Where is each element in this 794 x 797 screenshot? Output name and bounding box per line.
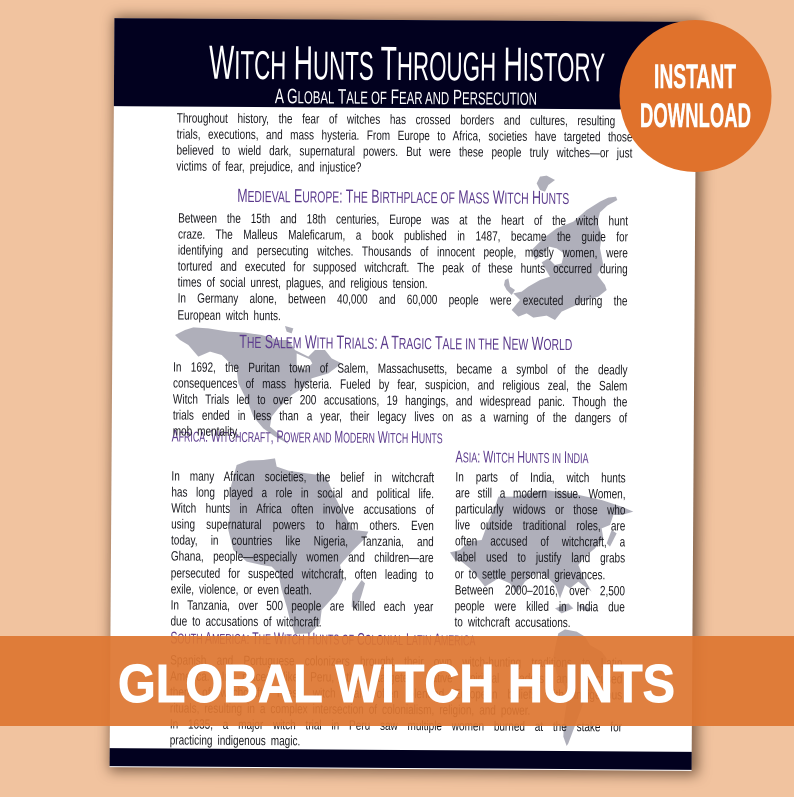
map: South America bbox=[553, 629, 607, 746]
paragraph: Africa bbox=[170, 469, 434, 629]
paragraph: Asia: particularly widows or those who bbox=[455, 502, 625, 518]
banner: Global Witch Hunts: GLOBAL WITCH HUNTS bbox=[118, 654, 675, 714]
paragraph: Salem: Witch Trials led to over 200 accusations, 19 hangings, and widespread panic. Though the bbox=[173, 392, 627, 410]
intro paragraph: believed to wield dark, supernatural powers. But were these people truly witches—or just bbox=[177, 143, 632, 161]
paragraph: Salem bbox=[173, 360, 628, 439]
paragraph: Africa: In Tanzania, over 500 people are killed each year bbox=[171, 597, 433, 614]
paragraph: Africa: persecuted for suspected witchcraft, often leading to bbox=[171, 565, 434, 582]
paragraph: Africa: exile, violence, or even death. bbox=[171, 581, 312, 597]
paragraph: Africa: Ghana, people—especially women and children—are bbox=[171, 549, 434, 566]
paragraph: Salem: In 1692, the Puritan town of Salem, Massachusetts, became a symbol of the deadly bbox=[173, 360, 628, 377]
paragraph: Asia bbox=[454, 469, 626, 630]
intro paragraph: Throughout history, the fear of witches has crossed borders and cultures, resulting in bbox=[177, 111, 633, 128]
paragraph: Asia: are still a modern issue. Women, bbox=[455, 485, 626, 502]
paragraph: Medieval Europe: craze. The Malleus Maleficarum, a book published in 1487, became the guide for bbox=[178, 227, 628, 245]
paragraph: Africa: In many African societies, the belief in witchcraft bbox=[171, 469, 434, 485]
paragraph: Asia: people were killed in India due bbox=[455, 598, 625, 614]
paragraph: South America: practicing indigenous magic. bbox=[170, 732, 300, 748]
intro paragraph: trials, executions, and mass hysteria. From Europe to Africa, societies have targeted those bbox=[177, 127, 633, 145]
paragraph: Asia: or to settle personal grievances. bbox=[455, 566, 605, 582]
paragraph: Africa: has long played a role in social and political life. bbox=[171, 485, 434, 501]
paragraph: South America: In 1635, a major witch trial in Peru saw multiple women burned at the stake for bbox=[170, 716, 622, 734]
paragraph: Asia: often accused of witchcraft, a bbox=[455, 534, 625, 550]
heading: Africa: AFRICA: WITCHCRAFT, POWER AND MODERN WITCH HUNTS bbox=[172, 427, 443, 447]
intro paragraph bbox=[176, 111, 633, 175]
intro paragraph: victims of fear, prejudice, and injustice? bbox=[176, 159, 361, 175]
paragraph: Medieval Europe: tortured and executed for supposed witchcraft. The peak of these hunts occurred during bbox=[178, 259, 628, 277]
paragraph: Medieval Europe: identifying and persecuting witches. Thousands of innocent people, mostly women, were bbox=[178, 243, 628, 261]
map: Asia bbox=[450, 490, 633, 613]
paragraph: Medieval Europe bbox=[177, 211, 628, 323]
paragraph: Asia: In parts of India, witch hunts bbox=[455, 469, 626, 485]
map: Europe bbox=[504, 176, 617, 320]
paragraph: Medieval Europe: Between the 15th and 18th centuries, Europe was at the heart of the witch hunt bbox=[178, 211, 628, 228]
paragraph: South America: Spanish and Portuguese colonizers brought their own witch-hunting traditions to Latin bbox=[170, 652, 622, 670]
paragraph: Africa: Witch hunts in Africa often involve accusations of bbox=[171, 501, 434, 517]
heading: South America: SOUTH AMERICA: THE WITCH HUNTS OF COLONIAL LATIN AMERICA bbox=[170, 628, 476, 649]
paragraph: Asia: Between 2000–2016, over 2,500 bbox=[455, 582, 625, 598]
paragraph: Africa: due to accusations of witchcraft. bbox=[170, 613, 322, 629]
paragraph: Africa: today, in countries like Nigeria, Tanzania, and bbox=[171, 533, 434, 550]
map: North America bbox=[175, 326, 342, 444]
paragraph: Africa: using supernatural powers to harm others. Even bbox=[171, 517, 434, 533]
paragraph: South America: them of witchcraft. These witch trials often blended European beliefs with indigenous bbox=[170, 684, 622, 702]
paragraph: Salem: trials ended in less than a year, their legacy lives on as a warning of the dangers of bbox=[173, 408, 627, 426]
paragraph: Medieval Europe: European witch hunts. bbox=[177, 307, 281, 323]
paragraph: South America: America. In places like Peru, they targeted native spiritual leaders and accused bbox=[170, 668, 622, 686]
paragraph: Asia: label used to justify land grabs bbox=[455, 550, 625, 566]
paragraph: Asia: live outside traditional roles, are bbox=[455, 518, 625, 534]
heading: Medieval Europe: MEDIEVAL EUROPE: THE BIRTHPLACE OF MASS WITCH HUNTS bbox=[237, 186, 569, 209]
paragraph: Medieval Europe: times of social unrest, plagues, and religious tension. bbox=[178, 275, 428, 292]
paragraph: South America: rituals, resulting in a complex intersection of colonialism, religion, and power. bbox=[170, 700, 530, 718]
title: WITCH HUNTS THROUGH HISTORY bbox=[209, 37, 605, 92]
subtitle: A GLOBAL TALE OF FEAR AND PERSECUTION bbox=[275, 85, 537, 110]
heading: Salem: THE SALEM WITH TRIALS: A TRAGIC TALE IN THE NEW WORLD bbox=[239, 332, 572, 355]
paragraph: Salem: mob mentality. bbox=[173, 424, 239, 439]
heading: Asia: ASIA: WITCH HUNTS IN INDIA bbox=[456, 447, 589, 467]
paragraph: Asia: to witchcraft accusations. bbox=[454, 614, 571, 630]
paragraph: Salem: consequences of mass hysteria. Fueled by fear, suspicion, and religious zeal, the Salem bbox=[173, 376, 627, 394]
map: Africa bbox=[228, 458, 368, 634]
paragraph: Medieval Europe: In Germany alone, between 40,000 and 60,000 people were executed during the bbox=[178, 291, 628, 309]
paragraph: South America bbox=[170, 652, 622, 748]
